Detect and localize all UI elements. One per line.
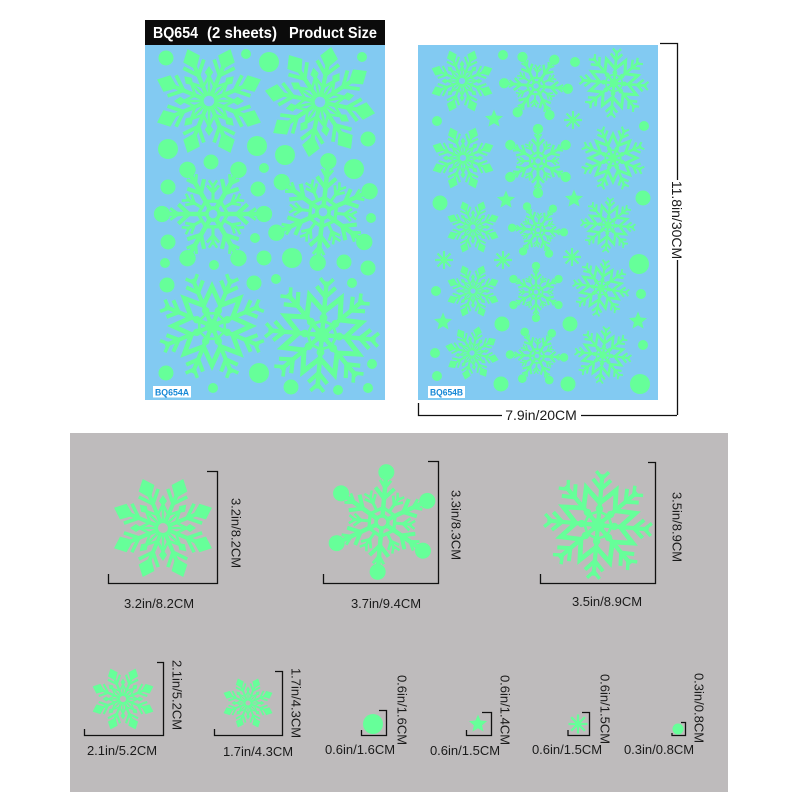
title bar: (2 sheets) — [207, 25, 277, 42]
dimension: sheet width: 7.9in/20CM — [505, 407, 577, 423]
label: BQ654A: BQ654A — [155, 388, 189, 398]
detail: small snowflake: 1.7in/4.3CM — [288, 668, 304, 738]
detail: small snowflake — [214, 668, 304, 759]
detail: medium snowflake: 2.1in/5.2CM — [170, 660, 184, 730]
detail: asterisk: 0.6in/1.5CM — [598, 674, 612, 744]
detail: ball snowflake — [322, 459, 464, 611]
dimension: sheet height — [660, 44, 685, 415]
detail: ball snowflake: 3.7in/9.4CM — [351, 596, 421, 611]
detail: large dot — [325, 675, 410, 757]
dimension: sheet width — [418, 403, 677, 423]
detail: medium snowflake — [84, 660, 184, 758]
detail: star-outline snowflake: 3.5in/8.9CM — [572, 594, 642, 609]
detail: star — [430, 675, 512, 758]
detail: medium snowflake: 2.1in/5.2CM — [87, 743, 157, 758]
panel: sheet A — [135, 36, 386, 400]
label: BQ654B: BQ654B — [430, 388, 463, 398]
detail: star: 0.6in/1.5CM — [430, 743, 500, 758]
detail: star-outline snowflake: 3.5in/8.9CM — [670, 492, 684, 562]
stars sheet B — [434, 110, 647, 330]
detail: large diamond snowflake: 3.2in/8.2CM — [228, 498, 244, 568]
snowflakes sheet A — [135, 36, 386, 396]
detail: asterisk: 0.6in/1.5CM — [532, 742, 602, 757]
detail: large dot: 0.6in/1.6CM — [325, 742, 395, 757]
detail: large diamond snowflake: 3.2in/8.2CM — [124, 596, 194, 611]
dots sheet A — [158, 49, 377, 395]
detail: small dot — [624, 673, 706, 757]
detail: star: 0.6in/1.4CM — [498, 675, 512, 745]
detail: ball snowflake: 3.3in/8.3CM — [448, 490, 464, 560]
detail: small dot: 0.3in/0.8CM — [692, 673, 706, 743]
detail: small snowflake: 1.7in/4.3CM — [223, 744, 293, 759]
panel: sheet B — [418, 35, 658, 400]
dimension: sheet height: 11.8in/30CM — [669, 181, 685, 259]
title bar: BQ654 — [153, 25, 198, 42]
detail: large diamond snowflake — [108, 472, 244, 611]
detail: star-outline snowflake — [540, 462, 684, 609]
detail: large dot: 0.6in/1.6CM — [394, 675, 410, 745]
snowflakes sheet B — [429, 35, 655, 398]
panel: size details — [70, 433, 728, 792]
title bar: Product Size — [289, 25, 377, 42]
detail: asterisk — [532, 674, 612, 757]
title bar — [145, 20, 385, 45]
detail: small dot: 0.3in/0.8CM — [624, 742, 694, 757]
dots sheet B — [430, 50, 650, 394]
asterisks sheet B — [435, 111, 582, 269]
